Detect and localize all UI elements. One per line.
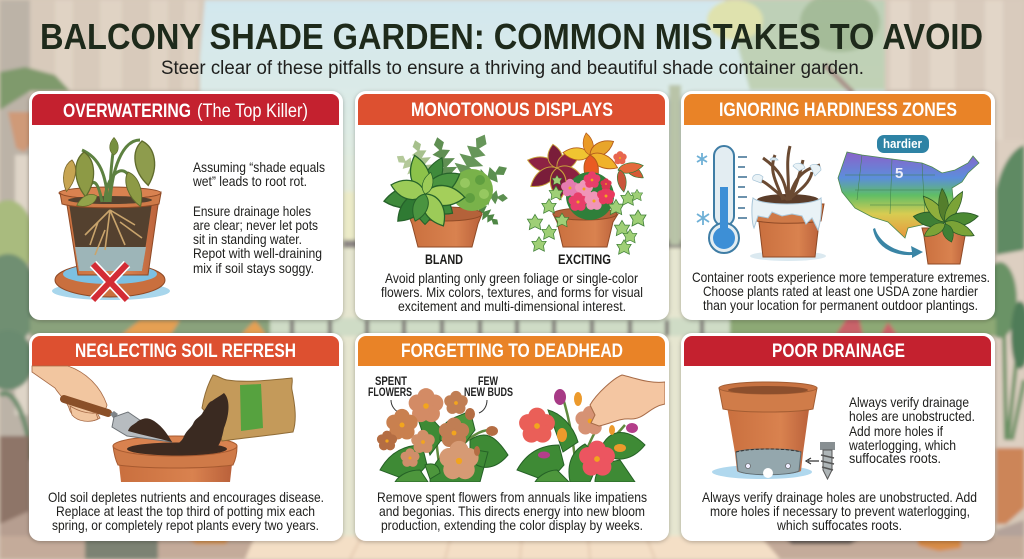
header: forgetting to deadhead [358, 336, 665, 366]
icon: plant with fresh flowers and hand deadheading [517, 375, 665, 482]
text: soil refresh advice: Old soil depletes nutrients and encourages disease. [48, 489, 324, 505]
text: drainage advice [702, 489, 977, 533]
text: drainage side note: holes are unobstructed. [849, 408, 975, 424]
label: spent flowers [368, 376, 412, 413]
subtitle: Steer clear of these pitfalls to ensure a thriving and beautiful shade container garden. [161, 58, 864, 79]
icon: thermometer with snowflakes [697, 146, 747, 253]
panel: monotonous displays [355, 91, 669, 320]
text: overwatering advice [192, 159, 325, 276]
header: neglecting soil refresh: NEGLECTING SOIL REFRESH [75, 341, 296, 362]
text: monotonous displays advice [381, 270, 643, 314]
icon: overwatered wilting plant in a pot with red cross [52, 137, 170, 300]
panel: ignoring hardiness zones [681, 91, 995, 320]
icon: pot with blocked drainage and screw [712, 382, 835, 479]
header: overwatering: OVERWATERING [63, 101, 191, 122]
header: overwatering: (The Top Killer) [197, 101, 308, 122]
icon: bland green planter [382, 128, 512, 267]
panel: overwatering [29, 91, 343, 320]
label: few new buds: FEW [478, 376, 498, 388]
text: monotonous displays advice: flowers. Mix colors, textures, and forms for visual [381, 284, 643, 300]
text: drainage side note: waterlogging, which [848, 437, 956, 453]
text: overwatering advice: mix if soil stays soggy. [193, 260, 314, 276]
text: overwatering advice: wet” leads to root rot. [192, 173, 307, 189]
text: hardiness zones advice [692, 269, 990, 313]
icon: frozen dead plant in pot [750, 146, 826, 261]
header: ignoring hardiness zones: IGNORING HARDINESS ZONES [719, 100, 957, 121]
icon: pot being refilled with soil [32, 366, 295, 482]
header: neglecting soil refresh [32, 336, 339, 366]
text: deadheading advice: Remove spent flowers from annuals like impatiens [377, 489, 647, 505]
text: drainage advice: Always verify drainage holes are unobstructed. Add [702, 489, 977, 505]
label: spent flowers: FLOWERS [368, 387, 412, 399]
text: monotonous displays advice: Avoid planting only green foliage or single-color [385, 270, 638, 286]
icon: hardy plant in pot [912, 188, 979, 264]
text: monotonous displays advice: excitement and multi-dimensional interest. [398, 298, 626, 314]
arrow: points to drainage holes [806, 458, 819, 464]
icon: screw [820, 442, 835, 479]
header: monotonous displays [358, 94, 665, 125]
text: hardiness zones advice: than your location for permanent outdoor plantings. [703, 297, 978, 313]
text: drainage advice: more holes if necessary to prevent waterlogging, [710, 503, 970, 519]
arrow: move to hardier plant [873, 228, 923, 258]
text: overwatering advice: are clear; never let pots [193, 217, 318, 233]
panel: forgetting to deadhead [355, 333, 669, 541]
text: deadheading advice: and begonias. This directs energy into new bloom [379, 503, 645, 519]
label: few new buds: NEW BUDS [464, 387, 513, 399]
panel: neglecting soil refresh [29, 333, 343, 541]
text: overwatering advice: sit in standing water. [193, 231, 302, 247]
header: monotonous displays: MONOTONOUS DISPLAYS [411, 100, 613, 121]
text: drainage side note: Always verify drainage [849, 394, 969, 410]
text: drainage side note [848, 394, 975, 466]
label: hardier badge: hardier [883, 137, 922, 151]
text: drainage advice: which suffocates roots. [776, 517, 902, 533]
text: drainage side note: Add more holes if [849, 423, 943, 439]
label: exciting: EXCITING [558, 251, 611, 267]
label: spent flowers: SPENT [375, 376, 407, 388]
panel: poor drainage [681, 333, 995, 541]
text: hardiness zones advice: Choose plants rated at least one USDA zone hardier [703, 283, 978, 299]
label: few new buds [464, 376, 513, 413]
text: overwatering advice: Ensure drainage holes [193, 203, 311, 219]
icon: hand holding trowel [32, 366, 172, 442]
label: hardier badge [877, 135, 929, 153]
header: overwatering [32, 94, 339, 125]
header: poor drainage [684, 336, 991, 366]
icon: plant with spent brown flowers [377, 388, 508, 482]
text: deadheading advice: production, extending the color display by weeks. [381, 517, 643, 533]
icon: exciting colourful planter [526, 132, 646, 267]
header: forgetting to deadhead: FORGETTING TO DEADHEAD [401, 341, 623, 362]
header: poor drainage: POOR DRAINAGE [772, 341, 905, 362]
text: overwatering advice: Assuming “shade equals [193, 159, 325, 175]
text: deadheading advice [377, 489, 647, 533]
text: soil refresh advice [48, 489, 324, 533]
label: bland: BLAND [425, 251, 463, 267]
header: ignoring hardiness zones [684, 94, 991, 125]
label: zone 5: 5 [895, 165, 903, 182]
text: drainage side note: suffocates roots. [849, 450, 941, 466]
icon: USDA zone map [838, 135, 979, 238]
text: soil refresh advice: spring, or completely repot plants every two years. [52, 517, 319, 533]
text: overwatering advice: Repot with well-draining [193, 245, 322, 261]
text: soil refresh advice: Replace at least the top third of potting mix each [56, 503, 315, 519]
